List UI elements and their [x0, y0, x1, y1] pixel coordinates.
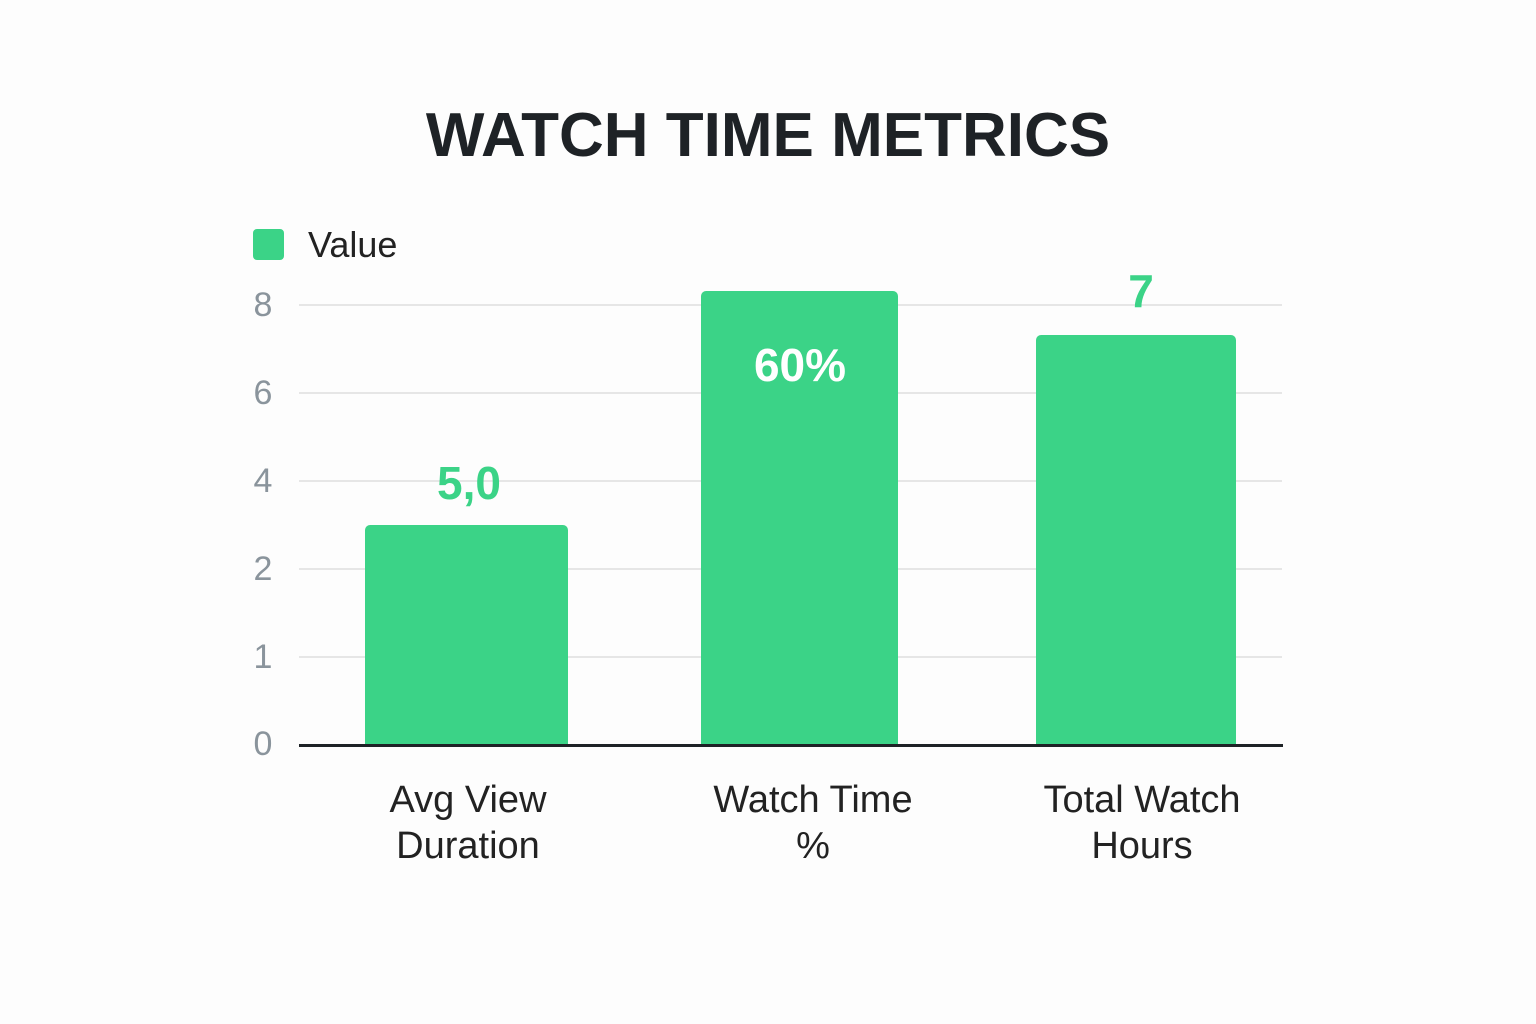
- value label 5,0: 5,0: [437, 457, 501, 509]
- y axis labels: 1: [254, 638, 272, 676]
- x label 3: [1043, 779, 1241, 867]
- x label 2: %: [796, 825, 830, 867]
- value label 60%: 60%: [754, 339, 846, 391]
- bar: total watch hours: [1036, 335, 1236, 746]
- title: WATCH TIME METRICS: [426, 101, 1110, 170]
- x axis line: [299, 744, 1283, 747]
- value label 7: 7: [1128, 265, 1154, 317]
- y axis labels: 0: [254, 725, 272, 763]
- x label 3: Total Watch: [1043, 779, 1241, 821]
- bar: avg view duration: [365, 525, 568, 746]
- y axis labels: [254, 286, 272, 763]
- y axis labels: 2: [254, 550, 272, 588]
- y axis labels: 8: [254, 286, 272, 324]
- legend swatch: [253, 229, 284, 260]
- y axis labels: 4: [254, 462, 272, 500]
- bar: watch time %: [701, 291, 898, 746]
- x label 1: Duration: [396, 825, 540, 867]
- x label 2: Watch Time: [713, 779, 913, 821]
- y axis labels: 6: [254, 374, 272, 412]
- x label 1: [389, 779, 547, 867]
- legend label: Value: [308, 224, 397, 265]
- x label 1: Avg View: [389, 779, 547, 821]
- x label 3: Hours: [1091, 825, 1193, 867]
- legend: [253, 224, 397, 265]
- x label 2: [713, 779, 913, 867]
